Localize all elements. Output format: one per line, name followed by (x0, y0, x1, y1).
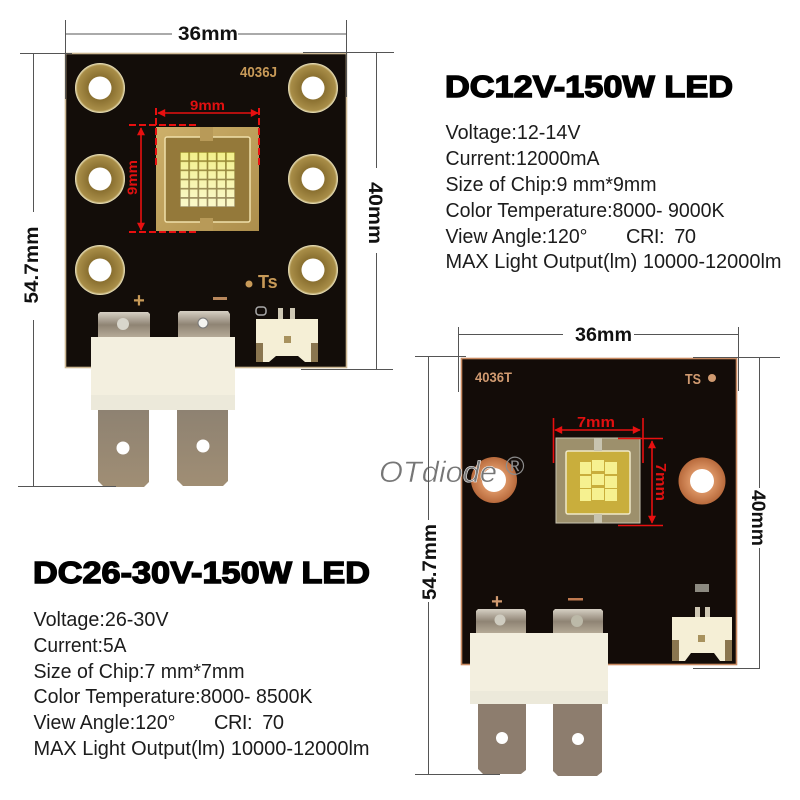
specification list: DC12V: MAX Light Output(lm) 10000-12000lm (446, 251, 782, 273)
specification list: DC12V (446, 122, 782, 273)
dimension: 40mm height, bottom: 40mm (747, 490, 768, 546)
connector, bottom board (672, 607, 732, 661)
TS marker (685, 371, 716, 388)
red 7mm chip dimensions (554, 414, 669, 526)
specification list: DC26-30V: Size of Chip:7 mm*7mm (34, 661, 244, 683)
top LED board (66, 54, 346, 368)
mounting holes, top board (75, 63, 338, 295)
board silkscreen 4036J: 4036J (240, 64, 277, 81)
specification list: DC12V: CRI: 70 (626, 226, 696, 248)
watermark: OTdiode (379, 451, 525, 489)
specification list: DC12V: Current:12000mA (446, 148, 600, 170)
dimension: 36mm width, bottom: 36mm (575, 325, 632, 346)
dimension: 54.7mm height, bottom: 54.7mm (420, 524, 441, 600)
red 9mm chip dimensions: 9mm (124, 160, 140, 195)
dimension: 40mm height, top (301, 52, 394, 370)
Ts marker: Ts (258, 272, 278, 292)
dimension: 54.7mm height, top: 54.7mm (22, 226, 43, 304)
heading: DC12V-150W LED: DC12V-150W LED (445, 69, 733, 104)
specification list: DC26-30V: Voltage:26-30V (34, 609, 169, 631)
negative symbol (568, 598, 583, 600)
specification list: DC12V: Color Temperature:8000- 9000K (446, 200, 725, 222)
Ts marker (246, 272, 278, 292)
specification list: DC26-30V: MAX Light Output(lm) 10000-12000lm (34, 738, 370, 760)
heading: DC26-30V-150W LED: DC26-30V-150W LED (33, 555, 370, 590)
LED dies (580, 460, 617, 501)
terminals, bottom board (470, 609, 608, 776)
negative symbol (213, 297, 227, 300)
watermark: OTdiode: OTdiode (379, 456, 497, 489)
positive symbol: + (491, 591, 503, 613)
SMD component (695, 584, 709, 592)
LED chip 7mm (556, 438, 640, 523)
TS marker: TS (685, 371, 701, 388)
red 7mm chip dimensions: 7mm (577, 414, 615, 431)
mounting holes, bottom board (471, 457, 726, 504)
specification list: DC12V: View Angle:120° (446, 226, 588, 248)
dimension: 40mm height, top: 40mm (364, 182, 385, 244)
specification list: DC26-30V: CRI: 70 (214, 712, 284, 734)
specification list: DC26-30V: Current:5A (34, 635, 127, 657)
red 9mm chip dimensions: 9mm (190, 97, 225, 113)
dimension: 40mm height, bottom (693, 358, 780, 668)
dimension: 36mm width, top: 36mm (178, 24, 238, 45)
dimension: 54.7mm height, bottom (415, 356, 500, 774)
specification list: DC12V: Size of Chip:9 mm*9mm (446, 174, 656, 196)
connector, top board (256, 307, 318, 362)
LED chip 9mm (156, 127, 259, 231)
terminals, top board (91, 311, 235, 487)
dimension: 36mm width, bottom (458, 325, 738, 392)
dimension: 54.7mm height, top (18, 53, 116, 486)
specification list: DC26-30V (34, 609, 370, 760)
red 9mm chip dimensions (124, 97, 259, 232)
positive symbol: + (133, 290, 145, 312)
dimension: 36mm width, top (65, 20, 346, 99)
watermark: OTdiode: ® (505, 451, 525, 481)
specification list: DC26-30V: Color Temperature:8000- 8500K (34, 686, 313, 708)
specification list: DC26-30V: View Angle:120° (34, 712, 176, 734)
specification list: DC12V: Voltage:12-14V (446, 122, 581, 144)
board silkscreen 4036T: 4036T (475, 369, 512, 385)
red 7mm chip dimensions: 7mm (652, 463, 669, 501)
bottom LED board (462, 358, 736, 664)
